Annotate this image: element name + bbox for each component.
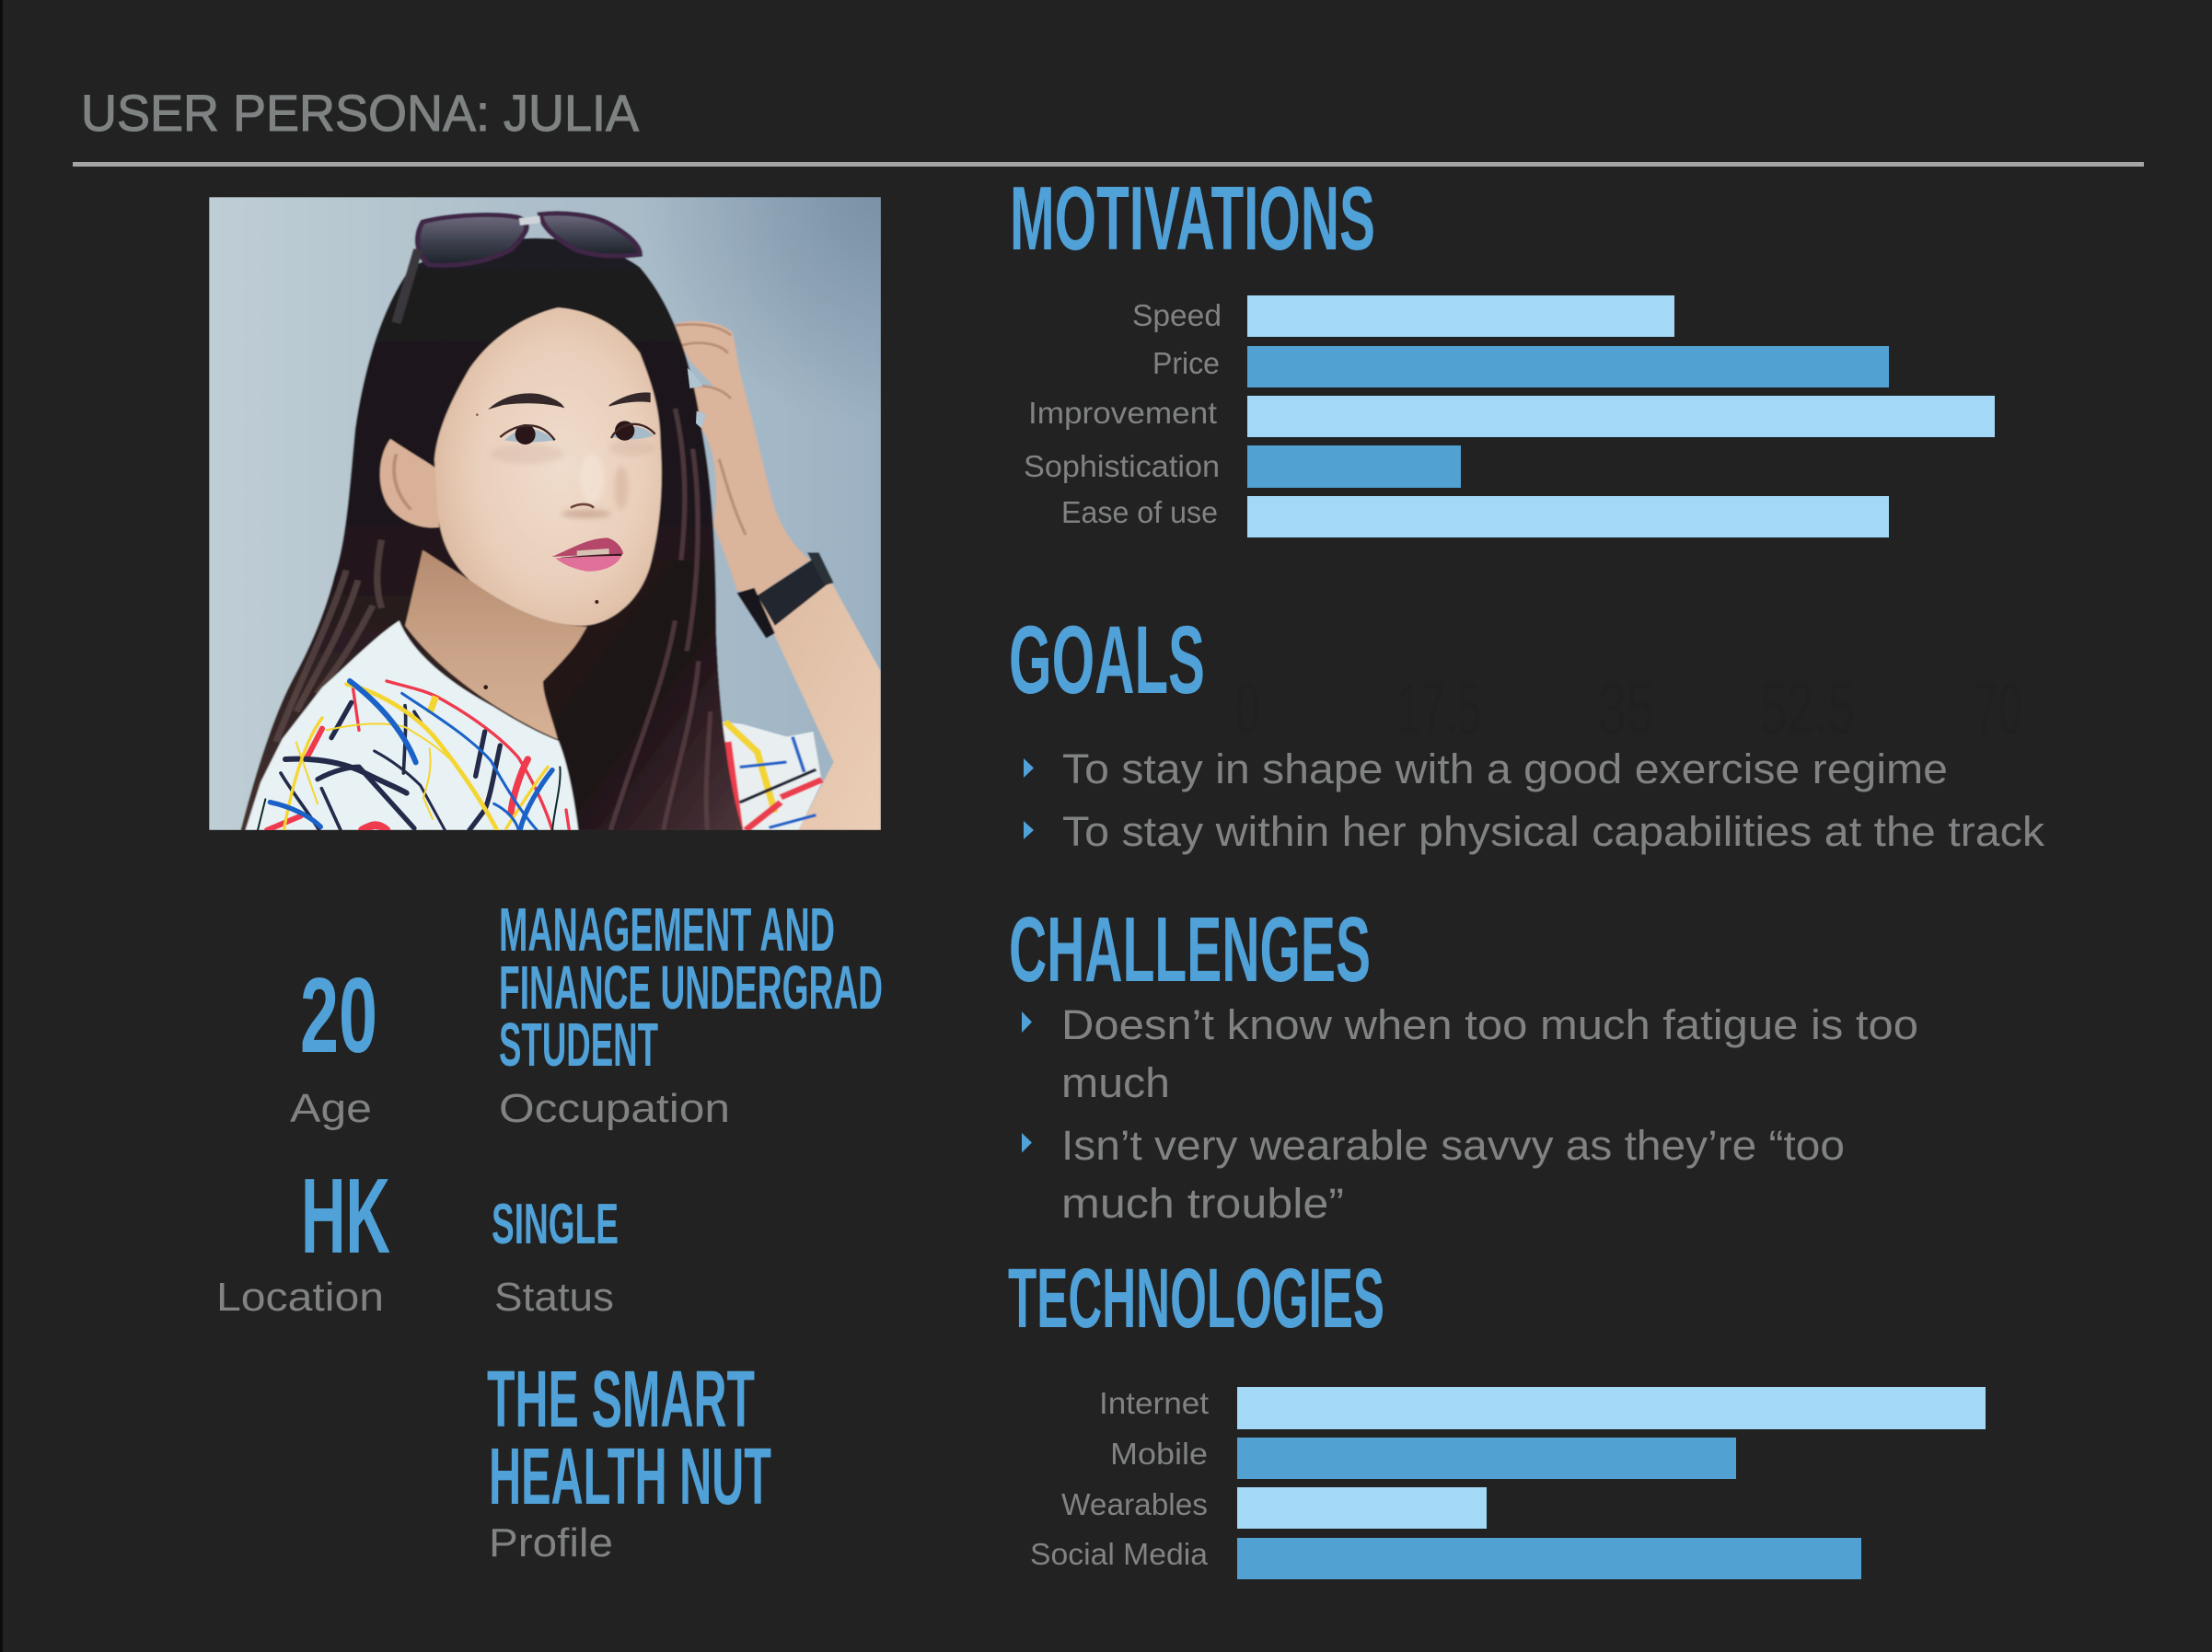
challenge bullet one [1022, 1001, 1918, 1106]
stat: occupation: Occupation [499, 1086, 730, 1131]
stat: location [216, 1156, 390, 1320]
stat: age: 20 [300, 955, 377, 1075]
bar chart: motivations: Price [1152, 346, 1220, 380]
stat: location: HK [301, 1156, 390, 1276]
stat: age: Age [290, 1086, 372, 1131]
stat: occupation: STUDENT [499, 1011, 658, 1080]
challenge bullet one: Doesn’t know when too much fatigue is too [1061, 1001, 1918, 1048]
stat: occupation [499, 895, 883, 1131]
bar chart: technologies: Wearables [1061, 1487, 1208, 1521]
stat: occupation: MANAGEMENT AND [499, 895, 835, 965]
panel: technologies [1008, 1252, 1986, 1579]
stat: age [290, 955, 377, 1131]
title: USER PERSONA: JULIA [81, 84, 640, 142]
bar chart: technologies: Internet [1099, 1386, 1209, 1420]
heading: goals: GOALS [1009, 607, 1205, 714]
bar chart: motivations: Ease of use [1061, 495, 1218, 529]
bar chart: technologies [1030, 1386, 1986, 1579]
portrait photo [209, 197, 881, 830]
challenge bullet two: Isn’t very wearable savvy as they’re “too [1061, 1122, 1845, 1169]
faint axis labels: 0 [1235, 667, 1259, 749]
stat: occupation: FINANCE UNDERGRAD [499, 953, 883, 1022]
stat: status: Status [494, 1275, 614, 1320]
panel: goals [1009, 607, 2045, 855]
faint axis labels [1235, 667, 2022, 749]
faint axis labels: 17.5 [1397, 667, 1481, 749]
stat: status: SINGLE [492, 1193, 619, 1256]
challenge bullet one: much [1061, 1059, 1170, 1106]
faint axis labels: 52.5 [1760, 667, 1855, 749]
stat: profile: Profile [489, 1520, 613, 1565]
faint axis labels: 70 [1975, 667, 2022, 749]
bar chart: motivations: Speed [1132, 298, 1222, 332]
stat: location: Location [216, 1275, 384, 1320]
heading: technologies: TECHNOLOGIES [1008, 1252, 1384, 1346]
challenge bullet two [1022, 1122, 1845, 1227]
challenge bullet two: much trouble” [1061, 1180, 1344, 1227]
panel: motivations [1010, 168, 1995, 537]
bar chart: motivations [1024, 295, 1995, 537]
goal bullet one: To stay in shape with a good exercise regime [1062, 745, 1948, 792]
stat: profile: THE SMART [487, 1355, 755, 1444]
stat: profile: HEALTH NUT [489, 1432, 771, 1521]
stat: profile [487, 1355, 771, 1565]
heading: challenges: CHALLENGES [1009, 898, 1371, 1001]
bar chart: motivations: Sophistication [1024, 449, 1220, 483]
bar chart: motivations: Improvement [1028, 396, 1217, 430]
bar chart: technologies: Mobile [1110, 1437, 1208, 1471]
faint axis labels: 35 [1598, 667, 1654, 749]
heading: motivations: MOTIVATIONS [1010, 168, 1375, 269]
bar chart: technologies: Social Media [1030, 1537, 1209, 1571]
stat: status [492, 1193, 619, 1320]
goal bullet two: To stay within her physical capabilities at the track [1062, 808, 2045, 855]
panel: challenges [1009, 898, 1918, 1227]
